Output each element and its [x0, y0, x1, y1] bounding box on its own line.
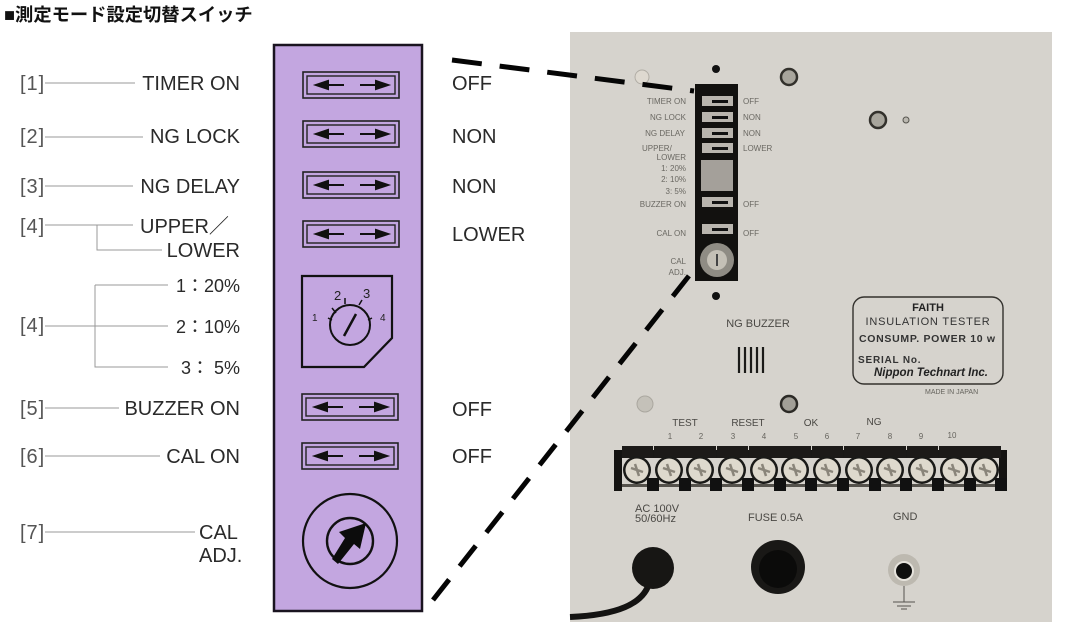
label 4 upper lower: UPPER／ [140, 216, 229, 238]
label 5 buzzer on [20, 398, 240, 420]
label 6 cal on [20, 446, 240, 468]
terminal labels: TEST [672, 418, 698, 429]
panel: photo of rear panel [570, 32, 1052, 622]
rotary selector: 1 [312, 313, 318, 324]
panel: switch off labels right: OFF [452, 399, 492, 421]
strip text labels: OFF [743, 97, 759, 106]
label 7 cal adj: ADJ. [199, 545, 242, 567]
terminal labels: 8 [888, 432, 893, 441]
nameplate [853, 297, 1003, 396]
ng buzzer grille: NG BUZZER [726, 318, 790, 330]
label 2 ng lock: NG LOCK [150, 126, 241, 148]
strip text labels: LOWER [743, 144, 773, 153]
label 1 timer on: TIMER ON [142, 73, 240, 95]
strip text labels: LOWER [657, 153, 686, 162]
strip text labels: UPPER/ [642, 144, 673, 153]
nameplate: INSULATION TESTER [865, 316, 991, 328]
panel: purple switch diagram [274, 45, 422, 611]
label 3 ng delay: [3] [20, 176, 45, 198]
terminal labels: 3 [731, 432, 736, 441]
panel: switch labels left [20, 73, 242, 567]
nameplate: MADE IN JAPAN [925, 389, 978, 396]
panel: switch off labels right [452, 73, 525, 468]
terminal labels [668, 417, 957, 441]
strip text labels: CAL [670, 257, 687, 266]
label 5 buzzer on: [5] [20, 398, 45, 420]
rotary selector: 4 [380, 313, 386, 324]
power, fuse and ground labels [635, 503, 918, 525]
panel: switch off labels right: OFF [452, 446, 492, 468]
nameplate: FAITH [912, 302, 944, 314]
terminal labels: 9 [919, 432, 924, 441]
label 4 upper lower: LOWER [167, 240, 240, 262]
strip text labels [640, 97, 773, 277]
label 3 ng delay: NG DELAY [140, 176, 240, 198]
strip text labels: NG LOCK [650, 113, 687, 122]
power plug and cord [570, 547, 674, 617]
label 3 ng delay [20, 176, 240, 198]
terminal labels: 5 [794, 432, 799, 441]
label 7 cal adj: CAL [199, 522, 238, 544]
strip text labels: NG DELAY [645, 129, 686, 138]
title: ■測定モード設定切替スイッチ [4, 4, 253, 25]
terminal labels: 6 [825, 432, 830, 441]
label 7 cal adj: [7] [20, 522, 45, 544]
nameplate: Nippon Technart Inc. [874, 367, 988, 379]
terminal labels: NG [866, 417, 882, 428]
terminal labels: 10 [948, 431, 957, 440]
terminal labels: OK [804, 418, 819, 429]
label 1 timer on: [1] [20, 73, 45, 95]
terminal block [614, 446, 1007, 491]
power, fuse and ground labels: FUSE 0.5A [748, 512, 804, 524]
terminal labels: 2 [699, 432, 704, 441]
switch 2 [303, 121, 399, 147]
strip text labels: 3: 5% [666, 187, 686, 196]
switch 3 [303, 172, 399, 198]
arrow: top dashed leader [452, 60, 694, 91]
nameplate: CONSUMP. POWER 10 w [859, 333, 996, 345]
switch 5 [302, 394, 398, 420]
strip text labels: 1: 20% [661, 164, 686, 173]
label 4 upper lower: [4] [20, 216, 45, 238]
label 5 buzzer on: BUZZER ON [124, 398, 240, 420]
label 2 ng lock [20, 126, 241, 148]
strip text labels: OFF [743, 200, 759, 209]
label 4 percent range: 3： 5% [181, 358, 240, 378]
rotary selector: 2 [334, 288, 341, 303]
label 6 cal on: [6] [20, 446, 45, 468]
terminal labels: RESET [731, 418, 765, 429]
ground terminal [888, 554, 920, 609]
label 2 ng lock: [2] [20, 126, 45, 148]
label 4 upper lower [20, 216, 240, 262]
label 6 cal on: CAL ON [166, 446, 240, 468]
strip text labels: 2: 10% [661, 175, 686, 184]
nameplate: SERIAL No. [858, 355, 921, 366]
terminal labels: 7 [856, 432, 861, 441]
strip text labels: NON [743, 129, 761, 138]
label 4 percent range: 1：20% [176, 276, 240, 296]
switch 6 [302, 443, 398, 469]
terminal labels: 4 [762, 432, 767, 441]
strip text labels: OFF [743, 229, 759, 238]
panel: switch off labels right: OFF [452, 73, 492, 95]
label 4 percent range: [4] [20, 315, 45, 337]
rotary selector: 3 [363, 286, 370, 301]
fuse holder [751, 540, 805, 594]
ng buzzer grille [726, 318, 790, 373]
strip text labels: NON [743, 113, 761, 122]
cal adj dial [303, 494, 397, 588]
screws and holes [635, 65, 909, 412]
panel: switch off labels right: NON [452, 126, 496, 148]
panel: switch off labels right: LOWER [452, 224, 525, 246]
arrow: bottom dashed leader [433, 272, 692, 600]
label 1 timer on [20, 73, 240, 95]
power, fuse and ground labels: AC 100V [635, 503, 680, 515]
strip text labels: ADJ. [669, 268, 686, 277]
switch strip [695, 84, 738, 281]
label 7 cal adj [20, 522, 242, 567]
label 4 percent range: 2：10% [176, 317, 240, 337]
power, fuse and ground labels: GND [893, 511, 918, 523]
label 4 percent range [20, 276, 240, 378]
rotary selector [302, 276, 392, 367]
terminal labels: 1 [668, 432, 673, 441]
panel: switch off labels right: NON [452, 176, 496, 198]
strip text labels: TIMER ON [647, 97, 686, 106]
power, fuse and ground labels: 50/60Hz [635, 513, 676, 525]
strip text labels: CAL ON [656, 229, 686, 238]
switch 4 [303, 221, 399, 247]
switch 1 [303, 72, 399, 98]
strip text labels: BUZZER ON [640, 200, 686, 209]
